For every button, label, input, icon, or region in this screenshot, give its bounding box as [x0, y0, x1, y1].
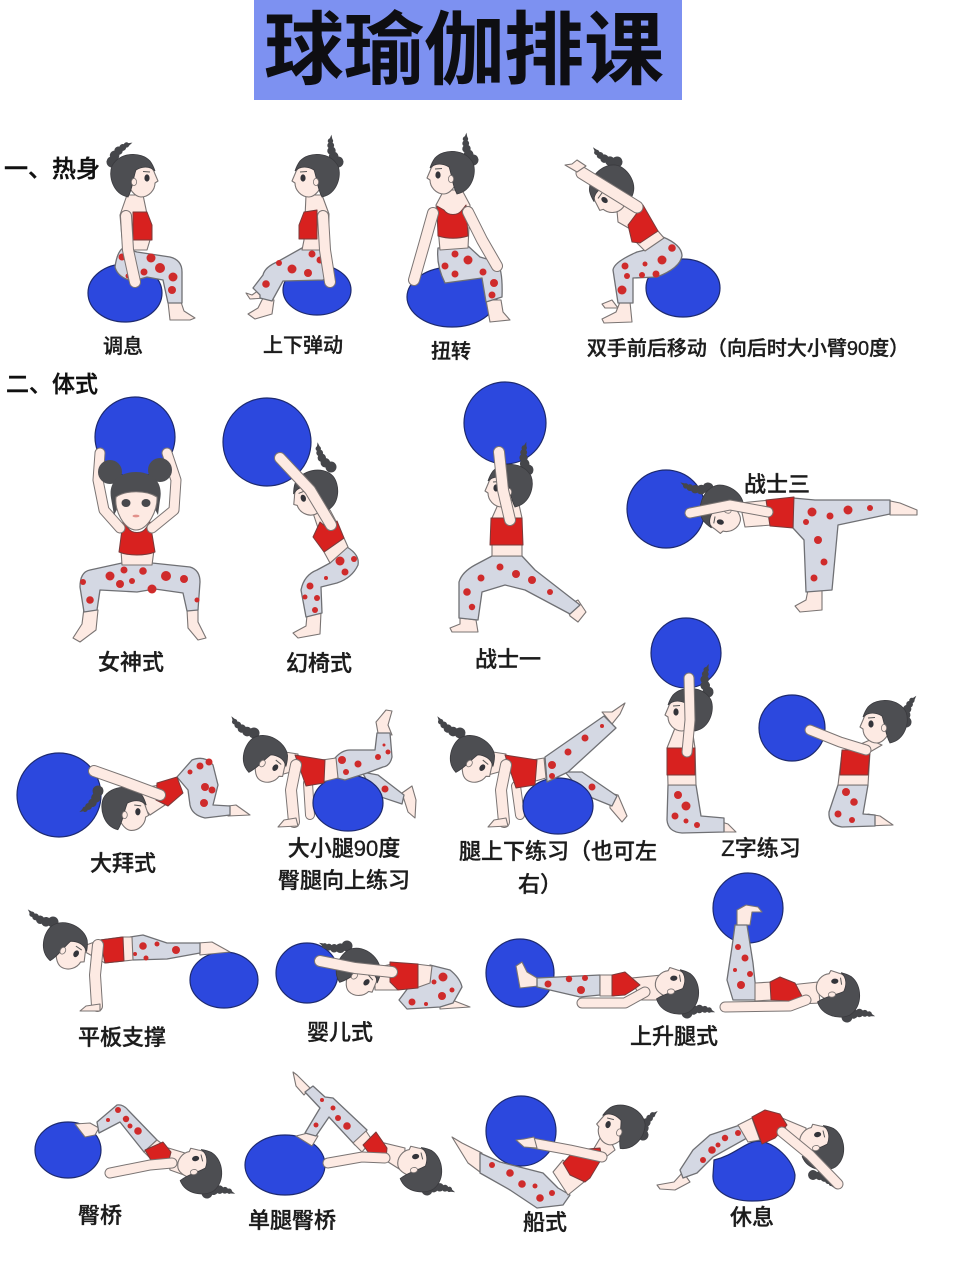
figure: single leg bridge	[245, 1072, 455, 1199]
figure: glute bridge	[35, 1105, 235, 1202]
figure: warrior three	[627, 470, 917, 612]
figure: Z kneeling arms forward	[759, 695, 916, 827]
label: arms forward and back: 双手前后移动（向后时大小臂90度）	[587, 337, 909, 360]
figure: leg up and down	[433, 703, 627, 834]
label: single leg bridge: 单腿臀桥	[248, 1208, 336, 1233]
label: glute leg lift: 臀腿向上练习	[278, 868, 410, 893]
label: bounce: 上下弹动	[263, 334, 343, 357]
label: glute bridge: 臀桥	[78, 1203, 122, 1228]
label: leg up and down line 1: 腿上下练习（也可左	[459, 839, 657, 864]
label: Z practice: Z字练习	[721, 836, 801, 861]
label: leg raise: 上升腿式	[630, 1024, 718, 1049]
label: chair pose: 幻椅式	[286, 651, 352, 676]
label: leg up and down line 2: 右）	[518, 872, 562, 897]
label: kneeling arm reach: 大拜式	[90, 851, 156, 876]
figure: bounce up and down	[246, 135, 351, 319]
label: breathing: 调息	[103, 335, 143, 358]
figure: chair pose	[223, 398, 358, 638]
label: twist: 扭转	[431, 340, 471, 363]
label: rest: 休息	[730, 1205, 774, 1230]
title banner: 球瑜伽排课	[264, 6, 664, 95]
figure: warrior one	[450, 382, 586, 632]
label: leg lift 90 degrees: 大小腿90度	[288, 836, 400, 861]
figure: arms forward and back	[565, 147, 720, 323]
figure: leg lift 90 degrees	[227, 710, 416, 831]
label: child pose: 婴儿式	[307, 1020, 373, 1045]
figure: plank	[25, 909, 258, 1011]
figure: leg raise on ball	[486, 939, 715, 1022]
figure: kneeling arm reach	[17, 753, 250, 837]
heading: poses: 二、体式	[6, 371, 98, 397]
figure: legs up to ball	[713, 873, 875, 1026]
figure: boat pose	[452, 1096, 658, 1208]
label: plank: 平板支撑	[78, 1025, 166, 1050]
label: goddess pose: 女神式	[98, 650, 164, 675]
heading: warm-up: 一、热身	[4, 156, 100, 183]
label: warrior one: 战士一	[475, 647, 541, 672]
figure: Z kneeling arms up	[651, 618, 736, 833]
label: boat pose: 船式	[523, 1210, 567, 1235]
figure: twist	[407, 133, 510, 327]
figure: breathing on ball	[88, 136, 195, 322]
label: warrior three: 战士三	[744, 472, 810, 497]
figure: goddess pose	[73, 397, 206, 642]
figure: rest on ball	[657, 1110, 847, 1201]
figure: child pose	[276, 937, 470, 1009]
